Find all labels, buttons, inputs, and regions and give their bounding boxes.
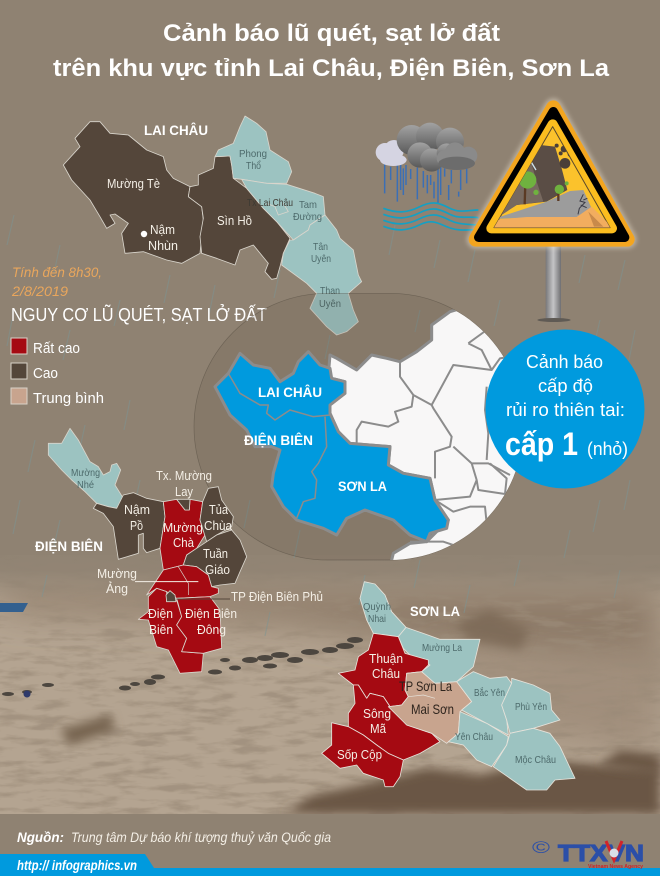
map: Điện Biên province: Biên [149,622,173,637]
map: Sơn La province: Quỳnh [363,601,391,613]
legend: date and risk levels: Trung bình [33,390,104,407]
map: Sơn La province: Mai Sơn [411,701,454,717]
map: Sơn La province [322,582,575,790]
legend: date and risk levels: 2/8/2019 [11,283,68,299]
panel: regional locator map: SƠN LA [338,478,387,494]
map: Sơn La province: Thuận [369,651,403,666]
map: Lai Châu province: Uyên [319,298,341,310]
logo: TTXVN: TTXVN [558,840,644,866]
map: Điện Biên province: Giáo [205,562,230,577]
footer: source and website: Nguồn: [17,829,64,845]
map: Điện Biên province: ĐIỆN BIÊN [35,537,103,554]
title: Cảnh báo lũ quét, sạt lở đất [163,20,500,47]
footer: source and website: Trung tâm Dự báo khí tượng thuỷ văn Quốc gia [71,829,331,845]
map: Sơn La province: Bắc Yên [474,686,505,699]
logo: TTXVN: Vietnam News Agency [588,864,644,870]
map: Lai Châu province: Nhùn [148,238,178,253]
callout: warning level: rủi ro thiên tai: [506,400,625,420]
map: Điện Biên province: Mường [71,467,100,479]
callout: warning level: Cảnh báo [526,352,603,372]
callout: warning level: (nhỏ) [587,439,628,459]
map: Lai Châu province: Mường Tè [107,176,160,191]
icon: storm clouds, rain and waves [376,123,478,230]
panel: regional locator map: LAI CHÂU [258,383,322,400]
footer: source and website [0,814,660,876]
map: Điện Biên province: Nậm [124,502,150,517]
map: Điện Biên province: Ảng [106,581,128,596]
map: Sơn La province: Sốp Cộp [337,747,382,762]
map: Lai Châu province: Đường [293,211,322,223]
map: Sơn La province: Mường La [422,642,462,654]
map: Sơn La province: Mã [370,721,387,736]
map: Sơn La province: Phù Yên [515,701,547,713]
map: Điện Biên province: Mường [163,520,203,535]
legend: date and risk levels: Tính đến 8h30, [12,264,102,280]
legend: date and risk levels: Rất cao [33,340,80,357]
map: Sơn La province: Sông [363,706,391,721]
panel: regional locator map: ĐIỆN BIÊN [244,431,313,448]
legend: date and risk levels: NGUY CƠ LŨ QUÉT, SẠT LỞ ĐẤT [11,304,267,325]
callout: warning level: cấp độ [538,376,593,396]
logo: TTXVN: © [532,838,551,857]
map: Lai Châu province: Tx Lai Châu [247,197,293,209]
map: Lai Châu province: Thổ [246,160,261,172]
map: Điện Biên province [35,428,323,673]
title: trên khu vực tỉnh Lai Châu, Điện Biên, Sơn La [53,55,610,82]
map: Lai Châu province: Tam [299,199,317,211]
title [53,20,610,82]
map: Lai Châu province: Phong [239,148,267,160]
map: Điện Biên province: Chùa [204,518,233,533]
map: Sơn La province: Yên Châu [455,731,493,743]
logo: TTXVN [532,838,644,870]
map: Sơn La province: SƠN LA [410,603,460,619]
map: Điện Biên province: Tx. Mường [156,468,212,483]
map: Lai Châu province: Tân [313,241,328,253]
map: Điện Biên province: TP Điện Biên Phủ [231,589,323,604]
map: Điện Biên province: Tủa [209,502,229,517]
map: Sơn La province: Nhai [368,613,386,625]
map: Sơn La province: TP Sơn La [399,678,452,694]
map: Điện Biên province: Nhé [77,479,94,491]
legend: date and risk levels: Cao [33,365,58,382]
map: Lai Châu province: Uyên [311,253,331,265]
map: Điện Biên province: Tuần [203,546,228,561]
background [0,215,660,814]
map: Lai Châu province: Nậm [150,222,175,237]
footer: source and website: http:// infographics.vn [17,857,137,873]
legend: date and risk levels [11,264,267,407]
map: Lai Châu province: Sìn Hồ [217,213,252,228]
callout: warning level: cấp 1 [505,426,578,462]
map: Điện Biên province: Điện [148,606,173,621]
map: Lai Châu province [63,116,362,335]
map: Điện Biên province: Chà [173,535,195,550]
map: Lai Châu province: Than [320,285,340,297]
panel: regional locator map [194,293,516,560]
map: Lai Châu province: LAI CHÂU [144,121,208,138]
map: Điện Biên province: Đông [197,622,226,637]
callout: warning level [486,330,644,488]
map: Điện Biên province: Điện Biên [185,606,237,621]
map: Sơn La province: Mộc Châu [515,754,556,766]
map: Sơn La province: Châu [372,666,400,681]
icon: landslide warning sign [476,108,627,322]
map: Điện Biên province: Lay [175,484,193,499]
map: Điện Biên province: Mường [97,566,137,581]
map: Điện Biên province: Pồ [130,518,143,533]
